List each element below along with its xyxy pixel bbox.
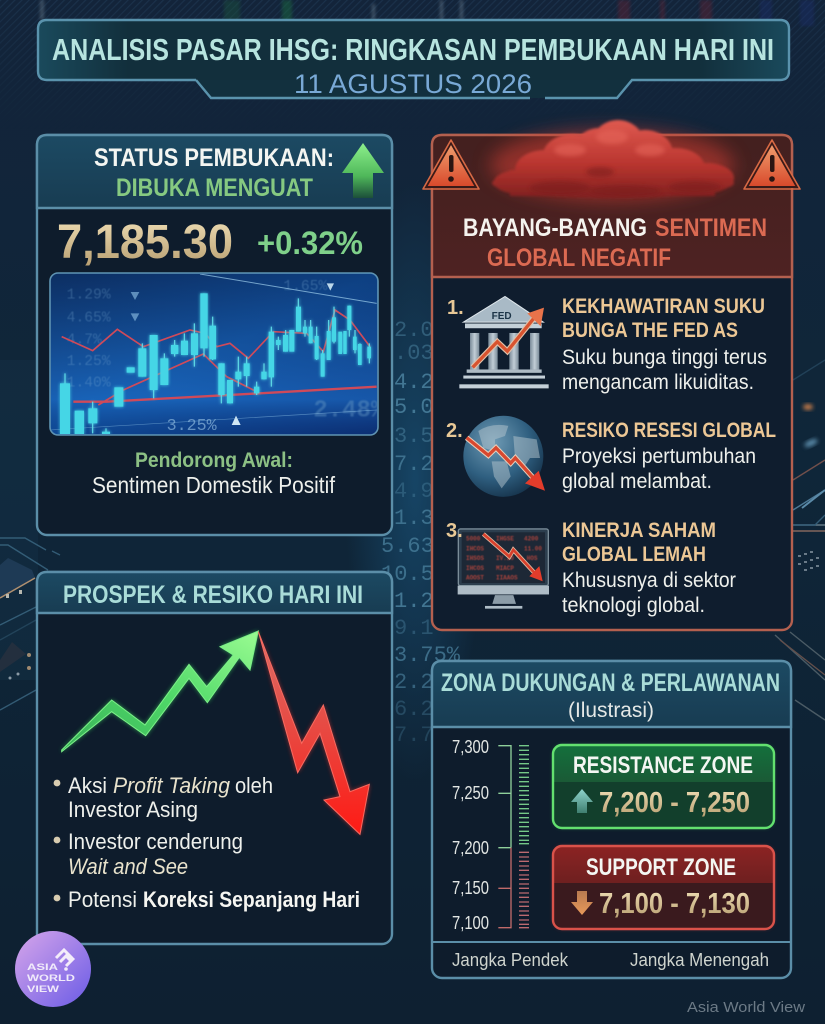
footer label: jangka pendek: Jangka Pendek <box>452 950 569 970</box>
price scale: 7,150 <box>452 878 489 898</box>
heading: bayang-bayang sentimen global negatif: BAYANG-BAYANG <box>463 214 647 242</box>
bullet list <box>54 773 360 912</box>
percent change: +0.32% <box>257 225 363 261</box>
background: 6.2 <box>394 697 434 722</box>
heading: dibuka menguat: DIBUKA MENGUAT <box>116 174 313 202</box>
bullet list: Investor Asing <box>68 797 198 822</box>
support zone box: SUPPORT ZONE <box>586 854 736 881</box>
bullet list: Wait and See <box>68 854 188 879</box>
item 1 description: Suku bunga tinggi terus <box>562 346 767 369</box>
heading: bayang-bayang sentimen global negatif: SENTIMEN <box>655 214 767 242</box>
candlestick chart: 4.65% <box>67 311 111 327</box>
background: 7.7 <box>394 723 434 748</box>
background: 3.5 <box>394 424 434 449</box>
background: 1.2 <box>394 589 434 614</box>
price scale: 7,200 <box>452 838 489 858</box>
logo: asia world view: WORLD <box>27 973 75 984</box>
item 2 description line 2: global melambat. <box>562 470 712 493</box>
panel: status pembukaan <box>37 135 392 535</box>
icon: green up arrow <box>342 143 384 198</box>
background <box>0 0 825 748</box>
item 3 heading: KINERJA SAHAM <box>562 519 716 542</box>
candlestick chart: 1.25% <box>67 354 111 370</box>
item 3: saham global <box>446 519 736 617</box>
icon: monitor with falling arrow: AOOST <box>466 575 484 582</box>
background: 4.2 <box>394 370 434 395</box>
number 1: 1. <box>447 297 464 319</box>
item 2 heading: RESIKO RESESI GLOBAL <box>562 419 776 442</box>
icon: monitor with falling arrow: MIACP <box>496 565 514 572</box>
background: 1.3 <box>394 506 434 531</box>
pendorong awal label: Pendorong Awal: <box>135 449 293 472</box>
bullet list: Investor cenderung <box>68 829 243 854</box>
panel: prospek dan resiko <box>37 572 392 944</box>
item 1 heading line 2: BUNGA THE FED AS <box>562 319 738 342</box>
background: 10.5 <box>381 562 434 587</box>
panel: zona dukungan dan perlawanan <box>432 661 791 978</box>
background: 2.2 <box>394 670 434 695</box>
bullet list: Aksi <box>68 773 107 798</box>
icon: monitor with falling arrow: IHCOS <box>466 565 484 572</box>
pendorong awal value: Sentimen Domestik Positif <box>92 472 336 498</box>
price scale: 7,250 <box>452 783 489 803</box>
item 1 heading: KEKHAWATIRAN SUKU <box>562 295 765 318</box>
candlestick chart: 3.25% <box>167 417 217 436</box>
date: 11 AGUSTUS 2026 <box>294 69 532 99</box>
resistance zone box <box>553 745 774 828</box>
title banner <box>38 20 789 99</box>
panel: sentimen global negatif <box>423 120 800 630</box>
heading: bayang-bayang sentimen global negatif <box>463 214 767 272</box>
candlestick chart: 4.7% <box>67 332 102 348</box>
watermark: Asia World View <box>687 999 805 1016</box>
icon: monitor with falling arrow: IIAAOS <box>496 575 518 582</box>
item 3 description: Khususnya di sektor <box>562 569 736 592</box>
icon: monitor with falling arrow: IHGSE <box>496 536 514 543</box>
background: 9.1 <box>394 616 434 641</box>
candlestick chart: 1.29% <box>67 287 111 303</box>
heading: bayang-bayang sentimen global negatif: GLOBAL NEGATIF <box>487 244 671 272</box>
candlestick chart <box>50 273 386 436</box>
subheading: ilustrasi: (Ilustrasi) <box>568 699 654 722</box>
support zone box <box>553 846 774 929</box>
icon: warning triangle left <box>423 140 479 189</box>
background: 4.9 <box>394 479 434 504</box>
icon: monitor with falling arrow: HOS <box>527 555 538 562</box>
background: 5.0 <box>394 395 434 420</box>
icon: red storm cloud <box>490 120 734 201</box>
candlestick chart: 1.65% <box>283 279 328 295</box>
logo: asia world view <box>15 931 91 1007</box>
item 3 description line 2: teknologi global. <box>562 594 705 617</box>
background: .03 <box>394 341 434 366</box>
icon: fed building with rising arrow <box>459 296 549 388</box>
price scale: 7,300 <box>452 737 489 757</box>
icon: monitor with falling arrow <box>458 529 549 609</box>
price scale <box>452 737 529 933</box>
heading: prospek: PROSPEK & RESIKO HARI INI <box>63 581 363 609</box>
chart: green rise arrow and red fall arrow <box>62 631 369 834</box>
item 1 description line 2: mengancam likuiditas. <box>562 371 754 394</box>
heading: status: STATUS PEMBUKAAN: <box>94 144 334 172</box>
item 2: resesi global <box>446 416 776 497</box>
icon: monitor with falling arrow: 5000 <box>466 536 481 543</box>
background: 3.75% <box>394 643 461 668</box>
background: 5.63 <box>381 534 434 559</box>
bullet list: Koreksi Sepanjang Hari <box>143 887 360 912</box>
resistance zone box: RESISTANCE ZONE <box>573 752 753 779</box>
support zone box: 7,100 - 7,130 <box>599 888 750 920</box>
bullet list: Profit Taking <box>113 773 231 798</box>
candlestick chart: 2.48% <box>313 398 386 425</box>
item 2 description: Proyeksi pertumbuhan <box>562 445 756 468</box>
icon: warning triangle right <box>744 140 800 189</box>
index value: 7,185.30 <box>57 216 233 269</box>
number 3: 3. <box>446 520 463 542</box>
icon: monitor with falling arrow: 11.00 <box>524 546 542 553</box>
icon: monitor with falling arrow: 4200 <box>524 536 539 543</box>
bullet list: Potensi <box>68 887 137 912</box>
item 3 heading line 2: GLOBAL LEMAH <box>562 543 706 566</box>
number 2: 2. <box>446 420 463 442</box>
icon: monitor with falling arrow: IHCOS <box>466 546 484 553</box>
candlestick chart: 1.40% <box>67 376 111 392</box>
background: 2.0 <box>394 318 434 343</box>
logo: asia world view: VIEW <box>27 984 59 995</box>
bullet list: oleh <box>235 773 273 798</box>
item 1: the fed <box>447 295 767 394</box>
price scale: 7,100 <box>452 913 489 933</box>
footer label: jangka menengah: Jangka Menengah <box>630 950 769 970</box>
icon: fed building with rising arrow: FED <box>492 311 512 322</box>
background: 7.2 <box>394 452 434 477</box>
icon: monitor with falling arrow: IV.20 <box>496 555 514 562</box>
logo: asia world view: ASIA <box>27 962 58 973</box>
resistance zone box: 7,200 - 7,250 <box>599 787 750 819</box>
icon: globe with falling arrow <box>463 416 545 497</box>
icon: monitor with falling arrow: IHSOS <box>466 555 484 562</box>
